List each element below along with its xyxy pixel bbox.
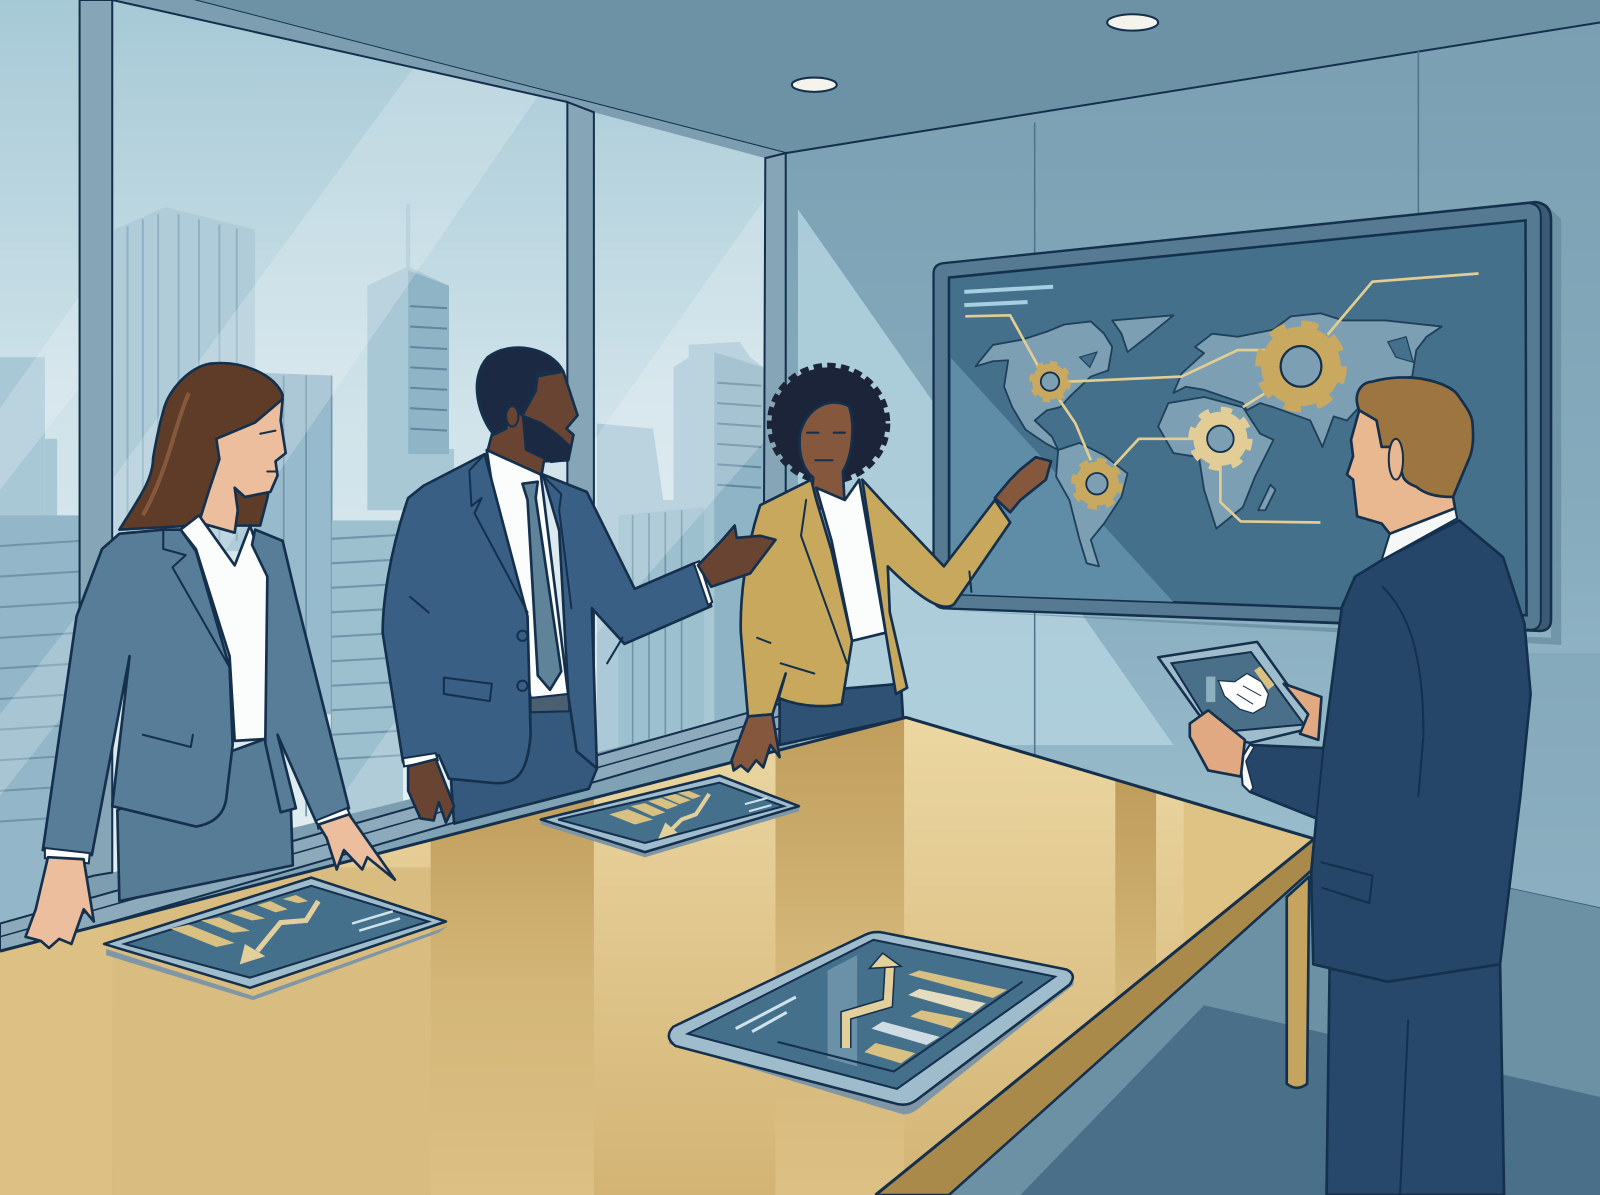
woman in grey suit xyxy=(43,363,351,901)
ceiling with lights xyxy=(194,0,1600,153)
tie xyxy=(522,482,561,690)
gear: north america xyxy=(1036,367,1064,396)
ear xyxy=(1389,439,1403,480)
hand on table: gold blazer xyxy=(732,714,780,771)
hands on tablet xyxy=(1190,710,1245,777)
man in navy suit xyxy=(383,348,776,824)
skirt xyxy=(117,739,293,901)
gear: south america xyxy=(1079,466,1115,502)
map title lines xyxy=(964,287,1053,305)
conference table xyxy=(0,704,1316,1195)
neck and face xyxy=(1347,410,1455,534)
skirt xyxy=(780,684,903,745)
gear: asia xyxy=(1268,334,1334,399)
table leg xyxy=(1287,877,1309,1088)
face and neck xyxy=(800,403,852,508)
hand on table: grey suit left xyxy=(26,857,94,948)
skyline buildings xyxy=(0,204,763,929)
floor xyxy=(878,842,1600,1195)
cuffs xyxy=(403,753,438,766)
cuffs xyxy=(45,848,90,863)
pants xyxy=(451,704,597,824)
wall xyxy=(786,20,1600,918)
wall panels and light xyxy=(798,51,1600,908)
afro hair xyxy=(771,367,886,480)
sunlight beams xyxy=(0,61,776,847)
hair xyxy=(1357,377,1473,497)
tablet: left on table xyxy=(104,878,447,1000)
icon: handshake xyxy=(1206,666,1274,713)
cuff xyxy=(1241,745,1254,792)
shirt xyxy=(487,450,568,698)
ear xyxy=(506,406,518,427)
hand on table: navy suit xyxy=(408,759,454,823)
window with skyline xyxy=(0,0,786,954)
jacket xyxy=(43,530,233,855)
hand gesturing xyxy=(698,526,776,587)
map continents xyxy=(976,313,1442,566)
hair xyxy=(119,363,283,530)
white collar xyxy=(1382,508,1457,560)
gear: africa xyxy=(1198,416,1243,461)
window frames xyxy=(80,0,786,880)
wall screen with world map xyxy=(934,202,1561,645)
beard xyxy=(522,415,571,462)
hand on table: grey suit right xyxy=(318,814,395,880)
hair xyxy=(477,348,563,435)
man seen from behind xyxy=(1158,377,1531,1195)
shirt xyxy=(181,515,267,741)
gold connection lines xyxy=(965,273,1479,522)
blazer xyxy=(741,480,852,716)
jacket xyxy=(383,454,531,783)
woman in gold blazer xyxy=(741,367,1051,745)
shirt xyxy=(816,480,886,641)
neck and face xyxy=(487,371,578,480)
belt xyxy=(531,694,569,712)
pants xyxy=(1327,959,1504,1195)
tablet: front on table xyxy=(669,932,1073,1114)
tablet: middle on table xyxy=(541,776,799,857)
hand raised to the map xyxy=(995,457,1051,512)
handheld tablet xyxy=(1158,642,1317,743)
neck and face xyxy=(199,399,286,533)
jacket xyxy=(1241,520,1531,982)
